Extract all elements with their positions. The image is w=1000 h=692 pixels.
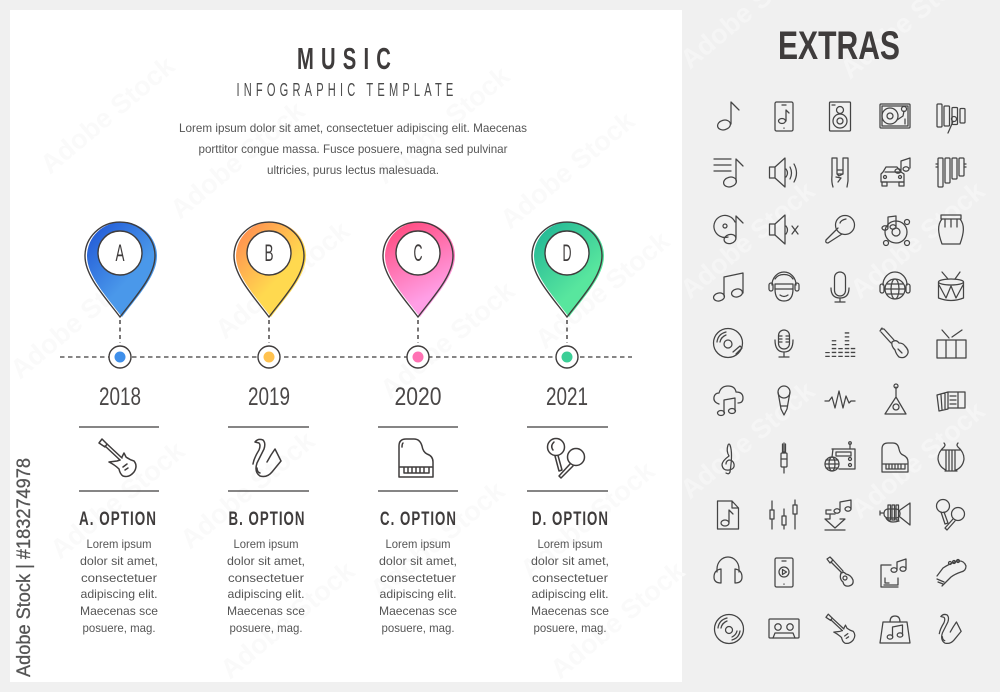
icon: piano: [882, 443, 908, 472]
pin B: [234, 222, 306, 317]
icon: speaker notes: [882, 216, 910, 246]
icon: cassette: [769, 619, 799, 638]
body text D: posuere, mag.: [534, 621, 606, 635]
icon: maracas small: [936, 500, 964, 530]
subtitle: INFOGRAPHIC TEMPLATE: [236, 79, 458, 100]
icon: saxophone small: [939, 614, 961, 643]
body text C: dolor sit amet,: [379, 554, 457, 568]
body text D: adipiscing elit.: [532, 587, 608, 601]
intro text: ultricies, purus lectus malesuada.: [267, 163, 439, 177]
column A: [79, 222, 159, 635]
intro text: [179, 121, 527, 177]
icon: snare drum: [938, 272, 964, 300]
icon: balalaika: [885, 384, 906, 414]
pin A: A: [116, 240, 124, 267]
column D: [527, 222, 609, 635]
icon: vinyl: [714, 614, 744, 644]
panel: extras icon grid: [713, 102, 966, 644]
icon: disc note: [714, 215, 743, 245]
icon: treble clef: [722, 444, 734, 474]
heading A: A. OPTION: [79, 508, 157, 530]
marker D: [556, 346, 578, 368]
icon: shopping bag notes: [880, 616, 910, 643]
icon: mute: [770, 215, 798, 244]
watermark pattern: Adobe Stock: [215, 555, 361, 685]
icon: music book: [881, 559, 906, 587]
body text D: Maecenas sce: [531, 604, 609, 618]
icon: trumpet: [880, 503, 910, 525]
icon: music file: [718, 501, 738, 529]
watermark pattern: Adobe Stock: [530, 225, 676, 355]
icon: lyre: [938, 443, 964, 471]
icon: turntable: [880, 104, 910, 128]
watermark pattern: Adobe Stock: [165, 95, 311, 225]
body text A: adipiscing elit.: [80, 587, 158, 601]
watermark pattern: Adobe Stock: [675, 175, 821, 305]
watermark pattern: Adobe Stock: [675, 375, 821, 505]
icon: accordion: [937, 392, 965, 411]
heading D: D. OPTION: [532, 508, 609, 530]
icon: equalizer: [828, 331, 853, 357]
year 2019: 2019: [248, 383, 290, 411]
body text D: Lorem ipsum: [538, 537, 603, 551]
icon: volume: [770, 158, 796, 187]
icon: note: [716, 102, 739, 131]
icon: saxophone: [253, 439, 281, 476]
pin A: [85, 222, 157, 317]
pin C: [383, 222, 455, 317]
body text B: posuere, mag.: [230, 621, 302, 635]
icon: DJ face: [769, 272, 799, 301]
icon: rock hand: [832, 158, 848, 187]
year 2021: 2021: [546, 383, 588, 411]
icon: phone play: [775, 558, 793, 587]
icon: download music: [825, 500, 851, 530]
connector C: [417, 320, 419, 343]
body text A: posuere, mag.: [82, 621, 156, 635]
body text B: [227, 537, 305, 635]
body text A: Lorem ipsum: [86, 537, 152, 551]
icon: acoustic guitar: [827, 557, 853, 586]
connector D: [566, 320, 568, 343]
icon: maracas: [548, 438, 584, 478]
icon: microphone: [826, 216, 854, 243]
body text B: Lorem ipsum: [234, 537, 299, 551]
icon: cloud music: [714, 386, 743, 416]
pin D: D: [562, 240, 572, 267]
year 2018: 2018: [99, 383, 141, 411]
icon: electric guitar small: [826, 614, 855, 643]
body text B: Maecenas sce: [227, 604, 305, 618]
body text C: consectetuer: [380, 571, 456, 585]
body text A: [80, 537, 158, 635]
watermark pattern: Adobe Stock: [845, 175, 991, 305]
icon: radio: [825, 442, 855, 471]
marker C: [407, 346, 429, 368]
watermark pattern: Adobe Stock: [365, 475, 511, 605]
icon: mixer sliders: [770, 500, 797, 529]
body text B: dolor sit amet,: [227, 554, 305, 568]
marker A: [109, 346, 131, 368]
title: MUSIC: [297, 41, 398, 76]
body text A: Maecenas sce: [80, 604, 158, 618]
watermark pattern: Adobe Stock: [210, 215, 356, 345]
pin D: [532, 222, 604, 317]
icon: marimba: [936, 158, 966, 187]
intro text: Lorem ipsum dolor sit amet, consectetuer adipiscing elit. Maecenas: [179, 121, 527, 135]
body text A: dolor sit amet,: [80, 554, 158, 568]
icon: phone note: [775, 102, 793, 131]
icon: studio mic: [775, 330, 793, 357]
column C: [378, 222, 458, 635]
icon: waveform: [825, 391, 855, 408]
rule: [527, 427, 608, 491]
icon: drum set: [937, 330, 966, 358]
connector B: [268, 320, 270, 343]
watermark pattern: Adobe Stock: [545, 555, 691, 685]
icon: xylophone: [937, 104, 965, 133]
body text D: consectetuer: [532, 571, 608, 585]
year 2020: 2020: [394, 383, 442, 411]
panel: timeline: [10, 10, 682, 682]
rule: [228, 427, 309, 491]
body text D: dolor sit amet,: [531, 554, 609, 568]
watermark pattern: Adobe Stock: [845, 395, 991, 525]
body text B: consectetuer: [228, 571, 304, 585]
body text D: [531, 537, 609, 635]
watermark pattern: Adobe Stock: [45, 435, 191, 565]
watermark pattern: Adobe Stock: [370, 60, 516, 190]
pin C: C: [414, 240, 422, 267]
icon: double note: [713, 273, 743, 302]
icon: car with notes: [881, 158, 910, 186]
watermark pattern: Adobe Stock: [35, 50, 181, 180]
icon: violin: [880, 328, 908, 358]
icon: electric guitar: [99, 439, 136, 476]
pin B: B: [264, 240, 274, 267]
stock credit: Adobe Stock | #183274978: [14, 458, 35, 677]
marker B: [258, 346, 280, 368]
watermark pattern: Adobe Stock: [495, 105, 641, 235]
icon: loudspeaker: [830, 102, 850, 131]
watermark pattern: Adobe Stock: [515, 455, 661, 585]
watermark pattern: Adobe Stock: [175, 425, 321, 555]
body text C: [379, 537, 457, 635]
icon: headphones: [714, 557, 742, 583]
intro text: porttitor congue massa. Fusce posuere, magna sed pulvinar: [198, 142, 508, 156]
body text A: consectetuer: [81, 571, 157, 585]
column B: [227, 222, 309, 635]
icon: handheld mic: [778, 386, 790, 415]
watermark pattern: Adobe Stock: [375, 275, 521, 405]
icon: condenser mic: [831, 272, 849, 302]
icon: conga: [939, 215, 963, 244]
timeline dashed axis: [60, 356, 632, 358]
icon: grand piano: [399, 439, 433, 477]
icon: audio jack: [781, 443, 787, 473]
rule: [79, 427, 159, 491]
icon: playlist note: [714, 159, 743, 188]
body text C: Lorem ipsum: [386, 537, 451, 551]
connector A: [119, 320, 121, 343]
body text C: adipiscing elit.: [380, 587, 456, 601]
heading C: C. OPTION: [380, 508, 457, 530]
body text B: adipiscing elit.: [228, 587, 304, 601]
icon: globe headphones: [880, 272, 910, 299]
body text C: Maecenas sce: [379, 604, 457, 618]
rule: [378, 427, 458, 491]
watermark pattern: Adobe Stock: [5, 255, 151, 385]
icon: guitar headstock: [937, 560, 966, 586]
heading B: B. OPTION: [228, 508, 306, 530]
icon: vinyl with arm: [714, 328, 742, 358]
extras heading: EXTRAS: [778, 24, 900, 68]
body text C: posuere, mag.: [382, 621, 454, 635]
